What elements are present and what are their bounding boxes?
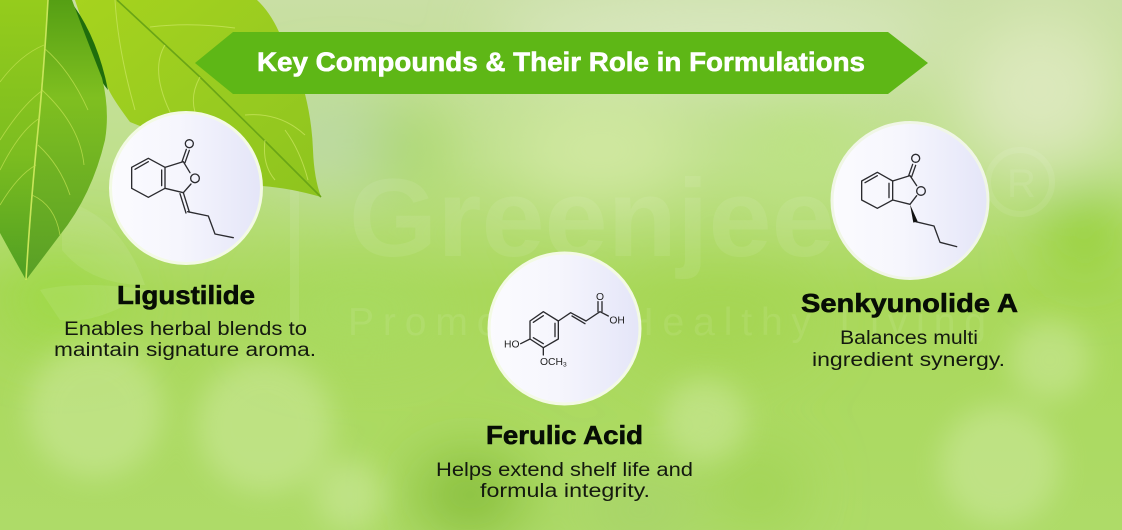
panel: Senkyunolide A xyxy=(801,122,1018,371)
watermark: Promoting Healthy Living xyxy=(348,301,986,344)
description: ingredient synergy. xyxy=(812,350,1005,371)
molecule disc: Ferulic Acid: OH xyxy=(609,316,625,327)
molecule disc: Senkyunolide A xyxy=(832,122,988,278)
molecule disc: Ferulic Acid: O xyxy=(596,292,604,303)
description: formula integrity. xyxy=(480,481,650,502)
dark slit between leaves xyxy=(74,6,108,90)
description xyxy=(54,319,316,361)
leaves xyxy=(0,0,321,280)
heading: Senkyunolide A xyxy=(801,288,1018,318)
molecule disc: Ligustilide xyxy=(110,112,262,264)
molecule disc: Ferulic Acid: 3 xyxy=(563,361,567,368)
title: Key Compounds & Their Role in Formulations xyxy=(257,47,865,77)
left leaf xyxy=(0,0,107,280)
watermark: R xyxy=(1007,162,1036,206)
molecule disc: Ferulic Acid xyxy=(489,253,640,404)
heading: Ligustilide xyxy=(117,280,255,310)
description: Enables herbal blends to xyxy=(64,319,307,340)
description: maintain signature aroma. xyxy=(54,340,316,361)
right leaf xyxy=(75,0,321,197)
description: Balances multi xyxy=(840,328,978,349)
molecule disc: Ferulic Acid: OCH xyxy=(540,357,563,368)
title banner xyxy=(195,32,928,94)
watermark xyxy=(40,150,1052,344)
panel: Ligustilide xyxy=(54,112,316,361)
molecule disc: Ferulic Acid: HO xyxy=(504,340,519,351)
watermark: Greenjeeva xyxy=(349,157,962,280)
description xyxy=(436,460,693,502)
description: Helps extend shelf life and xyxy=(436,460,693,481)
heading: Ferulic Acid xyxy=(486,420,643,450)
description xyxy=(812,328,1005,371)
panel: Ferulic Acid xyxy=(436,253,693,502)
